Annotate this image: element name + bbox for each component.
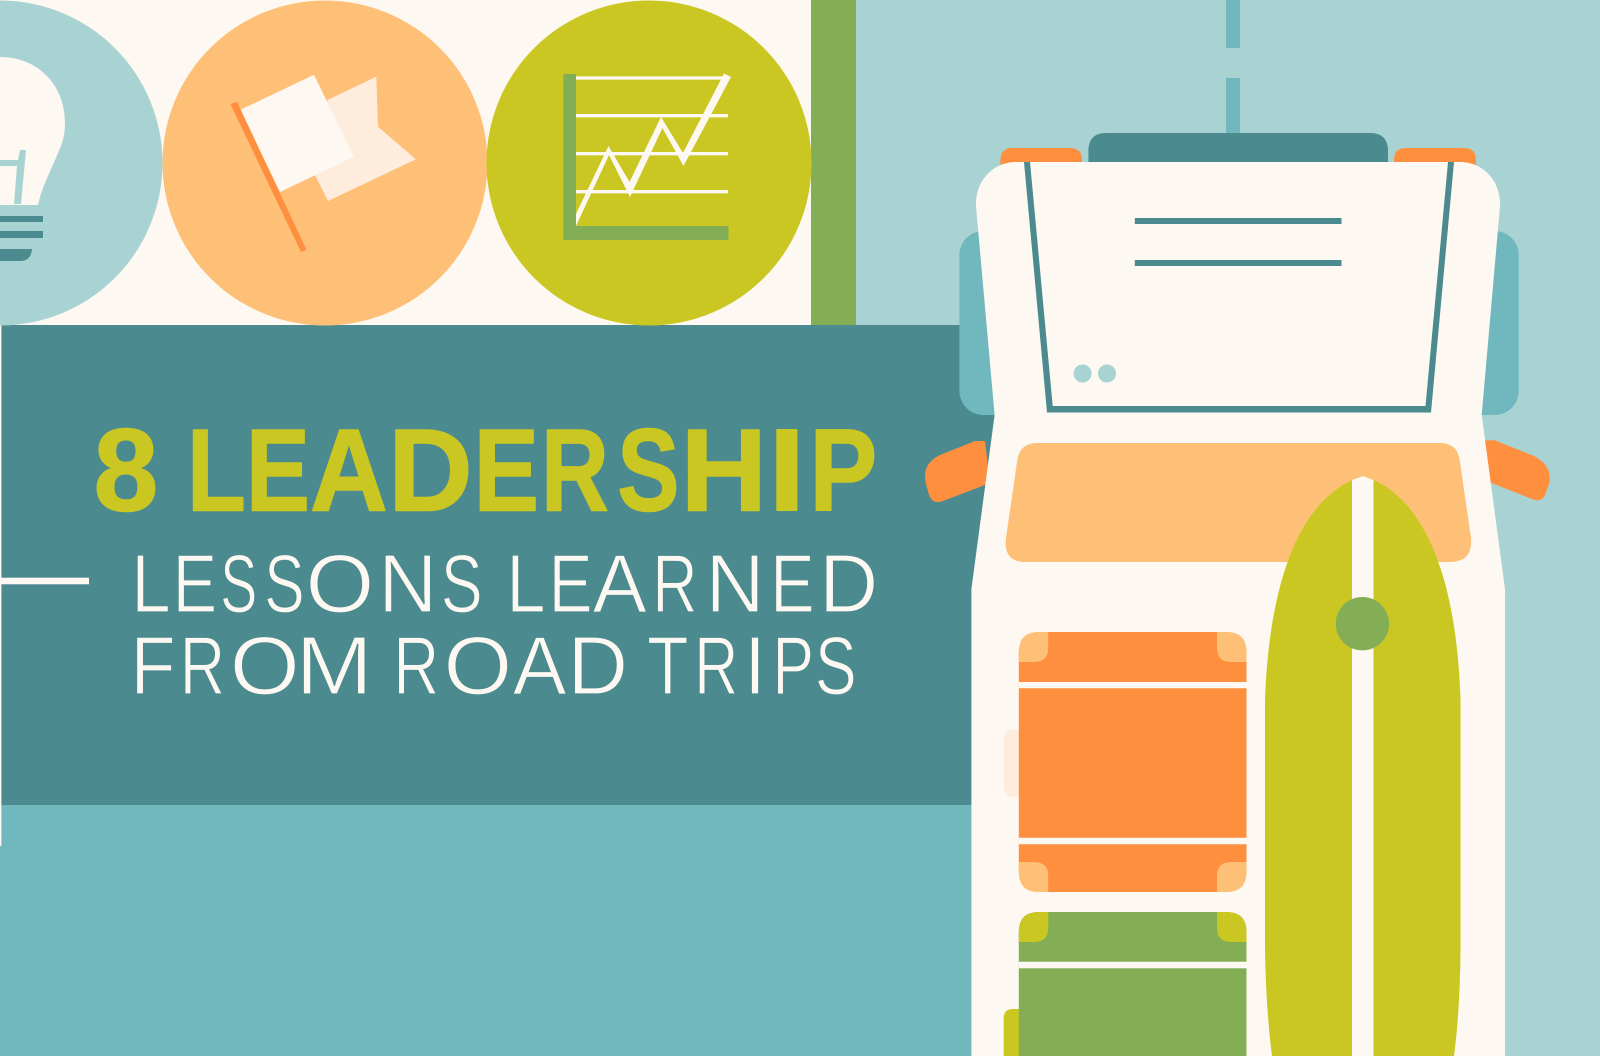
bulb cap (0, 249, 32, 261)
surfboard (1265, 476, 1460, 1056)
flag pole (230, 102, 307, 252)
subheading line 1: L (506, 537, 546, 630)
chart grid lines (576, 78, 728, 192)
subheading line 2: A (513, 619, 567, 712)
suitcase handle (1004, 1009, 1028, 1056)
suitcase corners (1019, 912, 1246, 942)
panel: title banner (1, 325, 1000, 805)
van rear seats (959, 231, 1519, 415)
van illustration (925, 133, 1550, 1056)
bulb base bars (0, 216, 43, 238)
front flag (240, 75, 354, 192)
subheading line 2: S (815, 619, 857, 712)
subheading line 2: D (568, 619, 628, 712)
green suitcase (1004, 912, 1246, 1056)
van cab (976, 162, 1500, 415)
heading: E (246, 404, 310, 535)
heading: A (310, 404, 388, 535)
green vertical bar (811, 0, 856, 325)
road centre dashes (1226, 0, 1240, 136)
icon: flag circle (162, 0, 488, 326)
back flag (315, 77, 416, 201)
icon: chart circle (486, 0, 812, 326)
decorative line left of subtitle (0, 578, 89, 584)
subheading line 1: A (592, 537, 648, 630)
suitcase straps (1019, 682, 1246, 844)
subheading line 2: T (647, 619, 688, 712)
windshield lines (1135, 218, 1342, 266)
chart trend line (576, 74, 731, 226)
heading: E (474, 404, 539, 535)
subheading line 2: M (296, 619, 373, 712)
subheading line 1: S (220, 537, 257, 630)
windshield dots (1074, 364, 1116, 382)
filament (0, 150, 26, 204)
left orange light (1000, 148, 1082, 170)
background: road light teal (856, 0, 1600, 1056)
heading: 8 (94, 404, 158, 535)
subheading line 2: F (131, 619, 175, 712)
right mirror arm (1480, 440, 1550, 500)
subheading line 2: R (694, 619, 738, 712)
windshield frame (1024, 162, 1454, 412)
heading: P (810, 404, 877, 535)
heading: H (681, 404, 767, 535)
subheading line 2: I (744, 619, 766, 712)
subheading line 1: E (549, 537, 592, 630)
left mirror arm (925, 441, 990, 502)
bulb glass (0, 57, 65, 205)
subheading line 1: S (264, 537, 305, 630)
subheading line 1: L (131, 537, 171, 630)
peach hood panel (1006, 443, 1471, 562)
subheading line 2: R (180, 619, 225, 712)
subheading line 1: N (706, 537, 764, 630)
suitcase body (1019, 912, 1246, 1056)
subheading line 1: E (173, 537, 217, 630)
subheading line 2: P (772, 619, 814, 712)
heading: I (768, 404, 806, 535)
subheading line 1: R (652, 537, 698, 630)
subheading line 1: E (770, 537, 814, 630)
board body (1265, 476, 1460, 1056)
suitcase body (1019, 632, 1246, 892)
subheading line 1: N (378, 537, 437, 630)
background: lower mid teal band (0, 805, 1000, 1056)
subheading line 1: D (819, 537, 878, 630)
heading: D (388, 404, 473, 535)
heading: S (617, 404, 679, 535)
suitcase corners (1019, 632, 1246, 892)
background: cream icon strip (0, 0, 856, 325)
board stripe (1352, 476, 1374, 1056)
icon: light bulb circle (0, 0, 162, 326)
subheading line 2: R (393, 619, 439, 712)
van hood and body (971, 415, 1505, 1056)
right orange light (1394, 148, 1476, 170)
suitcase handle (1004, 730, 1028, 797)
subheading line 2: O (444, 619, 512, 712)
chart axes (563, 74, 728, 240)
subheading line 2: O (230, 619, 300, 712)
heading: L (187, 404, 246, 535)
board fin circle (1336, 597, 1389, 650)
subheading line 1: O (306, 537, 374, 630)
left edge sliver (0, 325, 1, 846)
subheading line 1: S (441, 537, 483, 630)
suitcase strap (1019, 962, 1246, 968)
van roof rack (1088, 133, 1388, 170)
orange suitcase (1004, 632, 1246, 892)
heading: R (541, 404, 609, 535)
